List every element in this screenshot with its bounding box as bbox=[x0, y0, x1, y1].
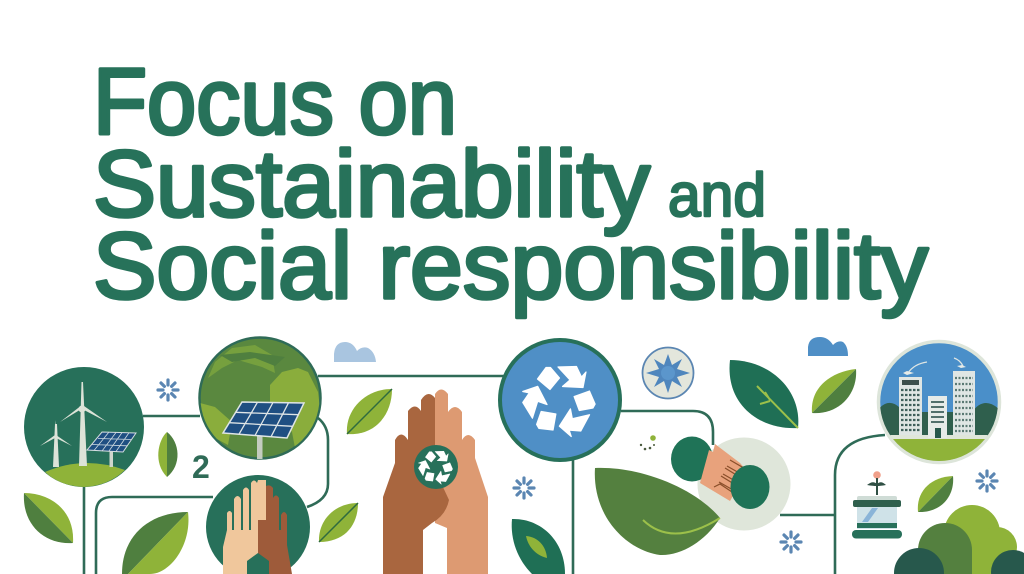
snowflake icon bbox=[781, 532, 801, 552]
building right bbox=[953, 371, 975, 435]
hand bbox=[700, 444, 747, 501]
number 2: 2 bbox=[192, 449, 210, 485]
title: Focus on bbox=[93, 48, 457, 154]
title bbox=[93, 48, 928, 318]
title: and bbox=[668, 161, 766, 229]
badge pentagon bbox=[247, 553, 269, 574]
leaf: beside hands lower bbox=[319, 503, 358, 542]
snowflake icon bbox=[514, 478, 534, 498]
leaf: beside hands upper bbox=[347, 389, 392, 434]
big leaf bbox=[595, 468, 720, 555]
brown hand bbox=[258, 485, 292, 574]
leaf: two-tone upper right bbox=[812, 369, 856, 413]
connector lines bbox=[84, 376, 885, 574]
title: Social responsibility bbox=[93, 213, 928, 318]
recycling circle bbox=[500, 340, 620, 460]
planter kiosk bbox=[852, 471, 902, 538]
star compass icon bbox=[642, 348, 694, 398]
handshake with globes bbox=[671, 436, 790, 530]
leaf: teal bottom bbox=[512, 519, 565, 574]
birds bbox=[908, 358, 963, 373]
bushes bbox=[894, 505, 1024, 574]
city circle bbox=[876, 342, 1002, 465]
left brown hand bbox=[383, 394, 449, 574]
solar panel bbox=[223, 402, 304, 459]
pale cloud bbox=[334, 342, 376, 362]
central raised hands bbox=[383, 390, 488, 574]
finger outlines bbox=[714, 460, 743, 492]
snowflake icon bbox=[158, 380, 178, 400]
leaf: teal upper bbox=[730, 360, 798, 428]
trees bbox=[876, 403, 1002, 436]
leaf: small vertical bbox=[158, 432, 178, 477]
small solar panel bbox=[87, 432, 136, 467]
snowflake icon bbox=[977, 471, 997, 491]
hands circle bbox=[206, 475, 310, 574]
wind turbines bbox=[40, 382, 107, 467]
recycling badge bbox=[414, 445, 458, 489]
tan hand bbox=[223, 480, 266, 574]
right tan hand bbox=[435, 390, 488, 574]
earth with solar panel bbox=[200, 338, 320, 459]
blue cloud bbox=[808, 337, 848, 356]
building middle bbox=[928, 396, 947, 438]
leaf: two-tone lower right bbox=[918, 476, 953, 512]
leaf: large bottom bbox=[122, 512, 188, 574]
building left bbox=[899, 377, 922, 435]
leaf: lower left bbox=[24, 493, 73, 543]
title: Sustainability bbox=[93, 131, 650, 236]
wind and solar circle bbox=[24, 367, 144, 487]
ground bbox=[893, 439, 985, 461]
tiny sparks bbox=[640, 435, 656, 450]
